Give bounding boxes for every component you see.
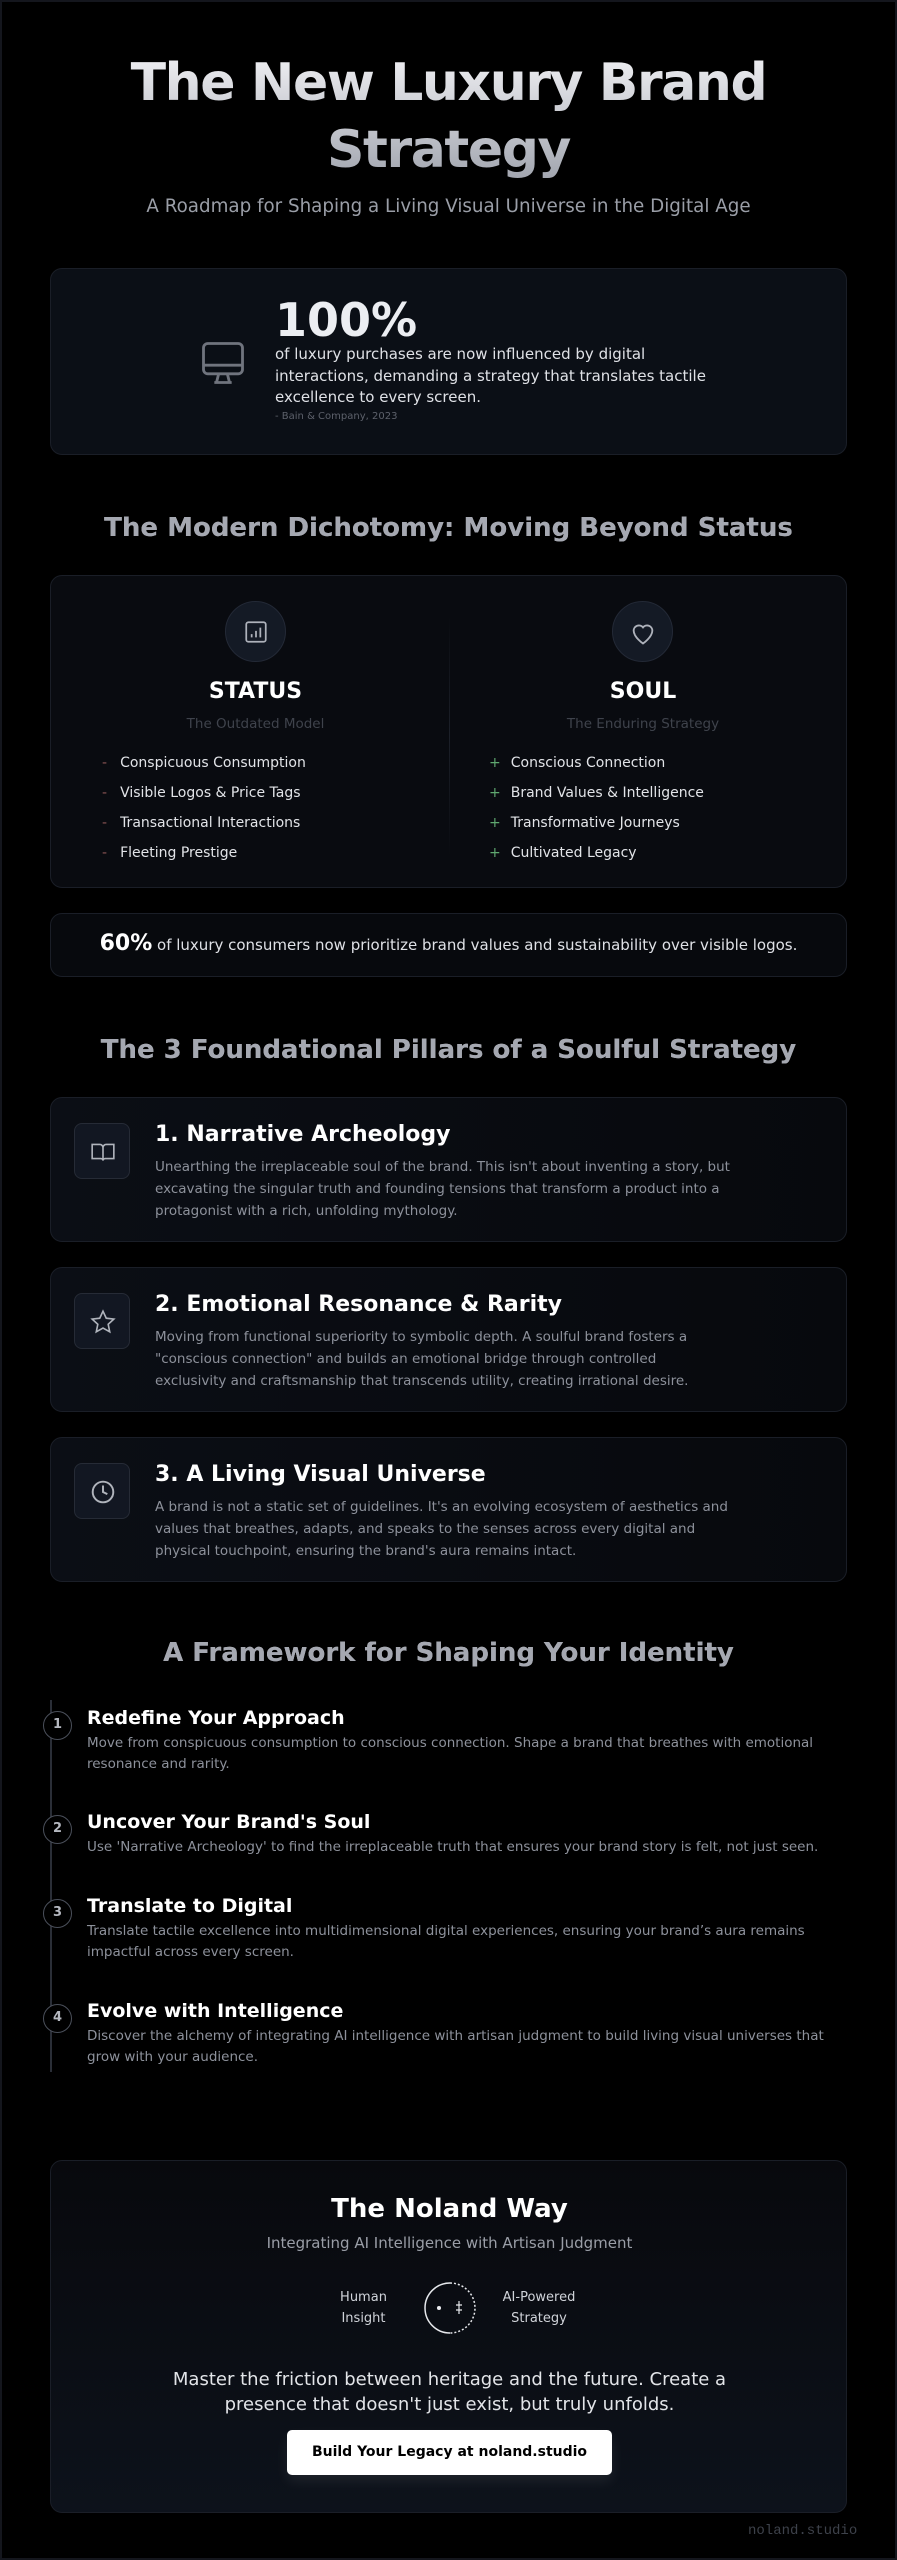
- status column: - Conspicuous Consumption: [102, 755, 306, 771]
- title: The Noland Way: [331, 2194, 568, 2224]
- panel: pillar 2: Moving from functional superiority to symbolic depth. A soulful brand fosters a "conscious connection" and builds an emotional bridge through controlled exclusivity and craftsmanship that transcends utility, creating irrational desire.: [155, 1329, 688, 1389]
- status column: - Transactional Interactions: [102, 815, 300, 831]
- status column: The Outdated Model: [187, 716, 324, 732]
- subtitle: A Roadmap for Shaping a Living Visual Universe in the Digital Age: [146, 196, 751, 217]
- stat text: of luxury purchases are now influenced by digital interactions, demanding a strategy that translates tactile excellence to every screen.: [275, 345, 706, 406]
- step 1: 1: [53, 1717, 62, 1732]
- stat number: 100%: [275, 293, 417, 347]
- source: - Bain & Company, 2023: [275, 411, 397, 422]
- step 4: Discover the alchemy of integrating AI intelligence with artisan judgment to build living visual universes that grow with your audience.: [87, 2028, 824, 2065]
- soul column: [489, 679, 719, 861]
- panel: pillar 1: 1. Narrative Archeology: [155, 1122, 450, 1147]
- soul column: + Transformative Journeys: [489, 815, 680, 831]
- soul column: + Brand Values & Intelligence: [489, 785, 704, 801]
- step 4: [43, 2000, 824, 2065]
- heading: pillars: The 3 Foundational Pillars of a Soulful Strategy: [101, 1035, 796, 1065]
- status column: - Fleeting Prestige: [102, 845, 237, 861]
- step 3: Translate tactile excellence into multidimensional digital experiences, ensuring your brand’s aura remains impactful across every screen.: [87, 1923, 805, 1960]
- soul column: + Cultivated Legacy: [489, 845, 637, 861]
- diagram: human + AI: Human: [340, 2290, 387, 2305]
- step 2: Uncover Your Brand's Soul: [87, 1811, 370, 1833]
- icon: star: [74, 1293, 130, 1349]
- panel: pillar 3: 3. A Living Visual Universe: [155, 1462, 486, 1487]
- diagram: human + AI: Insight: [341, 2311, 386, 2326]
- panel: pillar 2: [50, 1267, 847, 1412]
- diagram: human + AI: [340, 2282, 575, 2334]
- status column: STATUS: [209, 679, 302, 704]
- panel: pillar 3: A brand is not a static set of guidelines. It's an evolving ecosystem of aesthetics and values that breathes, adapts, and speaks to the senses across every digital and physical touchpoint, ensuring the brand's aura remains intact.: [155, 1499, 728, 1559]
- soul column: SOUL: [610, 679, 676, 704]
- timeline: [43, 1700, 824, 2072]
- diagram: human + AI: AI-Powered: [503, 2290, 575, 2305]
- step 3: Translate to Digital: [87, 1895, 292, 1917]
- button: Build Your Legacy at noland.studio: [312, 2444, 587, 2460]
- step 1: Redefine Your Approach: [87, 1707, 345, 1729]
- panel: pillar 1: Unearthing the irreplaceable soul of the brand. This isn't about inventing a story, but excavating the singular truth and founding tensions that transform a product into a protagonist with a rich, unfolding mythology.: [155, 1159, 730, 1219]
- heading: framework: A Framework for Shaping Your Identity: [163, 1638, 734, 1668]
- panel: pillar 2: 2. Emotional Resonance & Rarity: [155, 1292, 562, 1317]
- icon: heart: [612, 601, 673, 662]
- soul column: + Conscious Connection: [489, 755, 665, 771]
- step 3: 3: [53, 1905, 62, 1920]
- icon: monitor: [202, 342, 244, 384]
- icon: chart: [225, 601, 286, 662]
- status column: - Visible Logos & Price Tags: [102, 785, 301, 801]
- panel: pillar 1: [50, 1097, 847, 1242]
- panel: pillar 3: [50, 1437, 847, 1582]
- step 4: Evolve with Intelligence: [87, 2000, 343, 2022]
- title: [0, 50, 897, 184]
- status column: [102, 679, 324, 861]
- subtitle: Integrating AI Intelligence with Artisan Judgment: [267, 2234, 632, 2252]
- step 4: 4: [53, 2010, 62, 2025]
- title: Strategy: [327, 120, 570, 180]
- heading: dichotomy: The Modern Dichotomy: Moving Beyond Status: [104, 513, 793, 543]
- panel: digital stat: [50, 268, 847, 455]
- icon: book: [74, 1123, 130, 1179]
- step 2: [43, 1811, 818, 1855]
- step 2: Use 'Narrative Archeology' to find the irreplaceable truth that ensures your brand story is felt, not just seen.: [87, 1839, 818, 1855]
- icon: clock: [74, 1463, 130, 1519]
- callout: 60%: [50, 913, 847, 977]
- button: [287, 2430, 612, 2475]
- step 1: [43, 1707, 813, 1772]
- diagram: human + AI: Strategy: [511, 2311, 567, 2326]
- soul column: The Enduring Strategy: [567, 716, 719, 732]
- panel: noland way: [50, 2160, 847, 2513]
- title: The New Luxury Brand: [131, 53, 766, 113]
- closing text: Master the friction between heritage and the future. Create a presence that doesn't just exist, but truly unfolds.: [173, 2369, 726, 2415]
- panel: dichotomy: [50, 575, 847, 888]
- step 2: 2: [53, 1821, 62, 1836]
- callout: 60%: 60% of luxury consumers now prioritize brand values and sustainability over visible logos.: [100, 931, 797, 956]
- step 3: [43, 1895, 805, 1960]
- heading: framework: [0, 1638, 897, 1668]
- footer: noland.studio: [748, 2523, 857, 2539]
- step 1: Move from conspicuous consumption to conscious connection. Shape a brand that breathes with emotional resonance and rarity.: [87, 1735, 813, 1772]
